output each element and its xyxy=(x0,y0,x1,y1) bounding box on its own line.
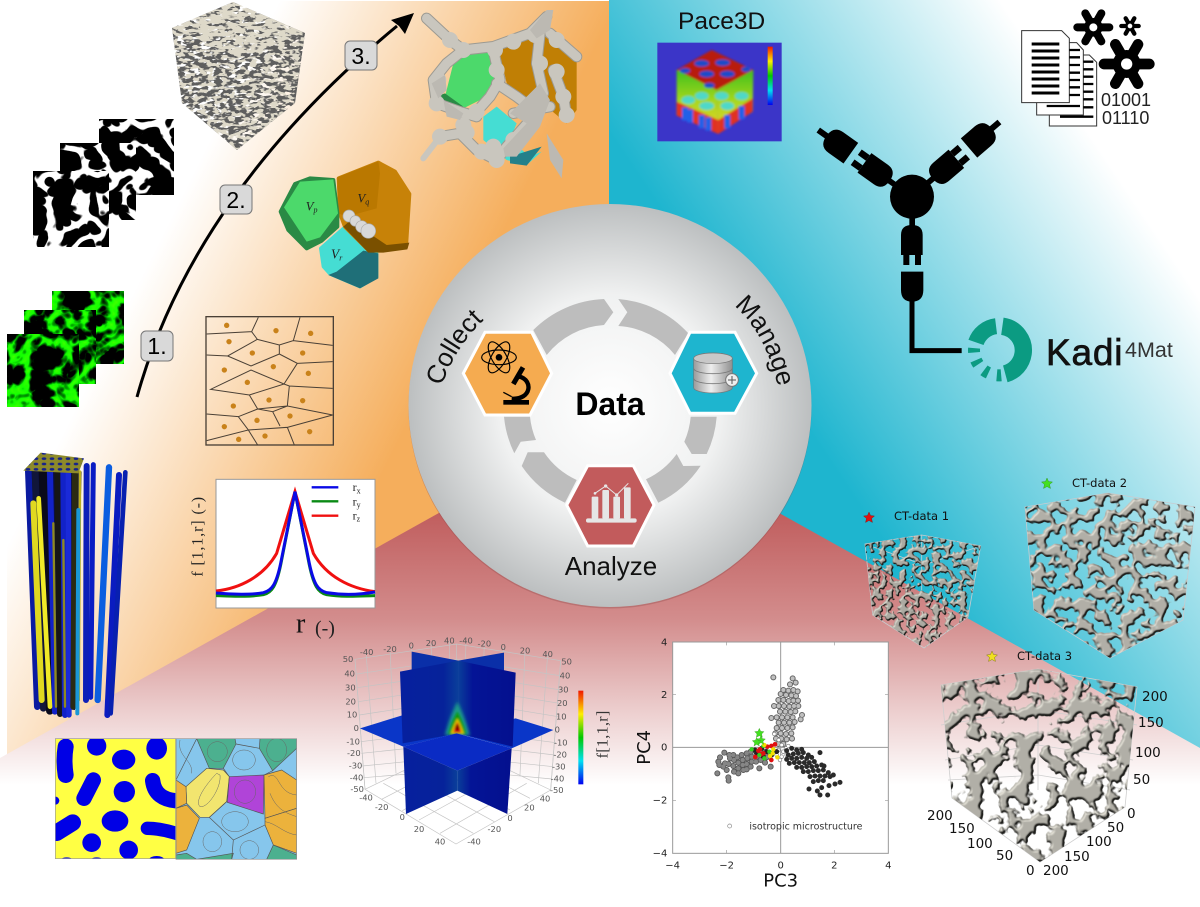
chart: 3D cross-section plot: -40 xyxy=(551,774,564,784)
chart: 3D cross-section plot: -30 xyxy=(552,761,566,771)
label: Collect: Collect xyxy=(428,310,484,382)
chart: 3D cross-section plot: 0 xyxy=(555,725,560,735)
chart: PC3 vs PC4 scatter xyxy=(634,637,892,892)
chart: PC3 vs PC4 scatter: −2 xyxy=(653,795,667,806)
chart: 3D cross-section plot: 0 xyxy=(501,642,506,652)
CT-data 3 volume with axes: 200 xyxy=(927,808,953,824)
CT-data 2 volume xyxy=(1025,476,1195,658)
chart: 3D cross-section plot: f[1,1,r] xyxy=(594,710,611,758)
simulation: multiphase grains colored xyxy=(176,738,297,859)
CT-data 3 volume with axes: 100 xyxy=(1135,745,1161,761)
label: Manage: Manage xyxy=(736,294,790,385)
chart: 3D cross-section plot: 20 xyxy=(426,638,436,648)
panel: teal manage background xyxy=(609,0,1200,750)
CT-data 3 volume with axes: 0 xyxy=(1127,806,1136,822)
heading: Pace3D: Pace3D xyxy=(678,8,765,35)
cycle arrows xyxy=(504,299,717,503)
3D porous cube xyxy=(172,2,305,150)
CT-data 3 volume with axes: 0 xyxy=(1026,863,1035,879)
fibers bundle 3D xyxy=(23,453,125,715)
icon: three-way connector xyxy=(811,112,1008,351)
chart: PC3 vs PC4 scatter: 0 xyxy=(661,743,667,754)
polyhedra grains Vp Vq Vr: r xyxy=(339,253,343,262)
CT-data 3 volume with axes: 150 xyxy=(1064,849,1090,865)
chart: correlation f[1,1,r] line plot: x xyxy=(357,486,361,495)
chart: correlation f[1,1,r] line plot: y xyxy=(357,501,361,510)
chart: 3D cross-section plot: 20 xyxy=(557,698,568,708)
chart: 3D cross-section plot: -10 xyxy=(346,736,360,746)
step label 1: 1. xyxy=(147,333,167,359)
chart: 3D cross-section plot: 20 xyxy=(520,645,530,655)
polyhedra grains Vp Vq Vr: V xyxy=(357,192,365,206)
chart: 3D cross-section plot: 30 xyxy=(558,685,569,695)
chart: 3D cross-section plot: -40 xyxy=(467,836,481,846)
CT-data 3 volume with axes: 200 xyxy=(1043,863,1069,879)
chart: 3D cross-section plot: 0 xyxy=(400,812,405,822)
chart: 3D cross-section plot: -50 xyxy=(550,785,564,795)
CT-data 1 volume xyxy=(864,509,981,648)
chart: correlation f[1,1,r] line plot: r xyxy=(353,494,357,508)
chart: correlation f[1,1,r] line plot: (-) xyxy=(315,617,335,639)
logo text: Kadi4Mat: Kadi xyxy=(1046,332,1123,373)
voronoi tessellation xyxy=(206,317,333,445)
CT-data 3 volume with axes: 50 xyxy=(1107,820,1124,836)
CT-data 3 volume with axes: CT-data 3 xyxy=(1017,649,1072,663)
chart: 3D cross-section plot: 40 xyxy=(540,793,550,803)
text: binary digits xyxy=(1101,90,1151,128)
chart: 3D cross-section plot: 40 xyxy=(542,649,553,659)
chart: PC3 vs PC4 scatter: isotropic microstructure xyxy=(749,821,863,832)
step label 3: 3. xyxy=(351,43,371,69)
CT-data 3 volume with axes xyxy=(927,649,1168,879)
chart: 3D cross-section plot: 0 xyxy=(507,813,513,823)
CT-data 3 volume with axes: 100 xyxy=(967,836,993,852)
chart: 3D cross-section plot: -20 xyxy=(347,748,361,758)
step label 2: 2. xyxy=(226,187,246,213)
chart: correlation f[1,1,r] line plot: r xyxy=(353,508,357,522)
chart: PC3 vs PC4 scatter: 4 xyxy=(885,860,892,871)
image stack: binary black and white slices xyxy=(33,119,174,247)
chart: PC3 vs PC4 scatter: 0 xyxy=(777,860,784,871)
CT-data 3 volume with axes: 200 xyxy=(1142,689,1168,705)
polyhedra grains Vp Vq Vr: V xyxy=(331,246,339,261)
panel: red analyze background xyxy=(0,418,1200,907)
text: binary digits: 01110 xyxy=(1102,108,1149,128)
chart: 3D cross-section plot: 40 xyxy=(344,669,355,679)
chart: 3D cross-section plot: -20 xyxy=(383,644,397,654)
chart: 3D cross-section plot: 40 xyxy=(560,671,570,681)
chart: 3D cross-section plot: -20 xyxy=(553,750,567,760)
logo text: Kadi4Mat xyxy=(1046,332,1173,373)
chart: 3D cross-section plot xyxy=(343,635,611,846)
chart: 3D cross-section plot: -10 xyxy=(554,737,568,747)
CT-data 3 volume with axes: 50 xyxy=(996,848,1013,864)
chart: 3D cross-section plot: -40 xyxy=(360,647,373,657)
logo: Kadi4Mat ring xyxy=(964,316,1034,385)
chart: 3D cross-section plot: -40 xyxy=(459,635,473,645)
center label: Data: Data xyxy=(575,386,645,422)
chart: 3D cross-section plot: 30 xyxy=(345,682,356,692)
step label 1 xyxy=(141,331,173,361)
CT-data 3 volume with axes: 50 xyxy=(1133,772,1150,788)
chart: PC3 vs PC4 scatter: 4 xyxy=(661,637,667,648)
logo text: Kadi4Mat: 4Mat xyxy=(1125,338,1173,362)
chart: 3D cross-section plot: 10 xyxy=(347,710,357,720)
chart: 3D cross-section plot: 20 xyxy=(414,824,424,834)
chart: correlation f[1,1,r] line plot: z xyxy=(357,515,361,524)
icon: documents xyxy=(1022,31,1097,126)
chart: 3D cross-section plot: -50 xyxy=(350,784,364,794)
simulation: phase field blue on yellow xyxy=(51,736,178,863)
chart: PC3 vs PC4 scatter: PC4 xyxy=(634,730,655,765)
CT-data 2 volume: CT-data 2 xyxy=(1072,476,1127,490)
chart: 3D cross-section plot: -20 xyxy=(488,824,501,834)
polyhedra grains Vp Vq Vr xyxy=(281,161,409,288)
CT-data 3 volume with axes: 150 xyxy=(949,821,975,837)
chart: 3D cross-section plot: 50 xyxy=(343,654,353,664)
chart: 3D cross-section plot: -20 xyxy=(375,802,388,812)
polyhedra grains Vp Vq Vr: p xyxy=(313,206,318,215)
panel: central data circle xyxy=(408,204,812,608)
hexagon: collect xyxy=(463,332,552,415)
step label 2 xyxy=(220,185,252,214)
CT-data 3 volume with axes: 150 xyxy=(1138,715,1164,731)
hexagon: analyze xyxy=(567,466,654,546)
chart: 3D cross-section plot: -20 xyxy=(478,639,491,649)
chart: correlation f[1,1,r] line plot: r xyxy=(296,608,306,639)
chart: PC3 vs PC4 scatter: PC3 xyxy=(763,871,798,892)
chart: PC3 vs PC4 scatter: −2 xyxy=(719,860,734,871)
chart: 3D cross-section plot: -40 xyxy=(359,792,373,802)
chart: 3D cross-section plot: 0 xyxy=(409,641,414,651)
chart: correlation f[1,1,r] line plot: f [1,1,r] (-) xyxy=(189,496,206,577)
polyhedra with pore network xyxy=(423,10,577,178)
step label 3 xyxy=(345,41,377,70)
chart: 3D cross-section plot: -40 xyxy=(350,772,363,782)
chart: correlation f[1,1,r] line plot: r xyxy=(353,480,357,494)
label: Analyze: Analyze xyxy=(565,551,657,581)
CT-data 3 volume with axes: 100 xyxy=(1086,834,1112,850)
icon: gears xyxy=(1077,13,1149,84)
chart: 3D cross-section plot: 40 xyxy=(444,635,455,645)
CT-data 1 volume: CT-data 1 xyxy=(894,509,949,523)
image stack: green microscopy slices xyxy=(7,291,124,407)
chart: correlation f[1,1,r] line plot xyxy=(189,479,375,639)
chart: PC3 vs PC4 scatter: −4 xyxy=(653,849,667,860)
chart: 3D cross-section plot: 0 xyxy=(354,723,359,733)
chart: 3D cross-section plot: 10 xyxy=(556,711,567,721)
scatter clusters xyxy=(717,677,840,795)
chart: 3D cross-section plot: 20 xyxy=(524,802,535,812)
chart: PC3 vs PC4 scatter: 2 xyxy=(661,690,667,701)
chart: PC3 vs PC4 scatter: 2 xyxy=(831,860,838,871)
text: binary digits: 01001 xyxy=(1101,90,1151,110)
hexagon: manage xyxy=(670,332,757,413)
image: Pace3D simulation cube xyxy=(657,43,782,141)
chart: 3D cross-section plot: -30 xyxy=(349,761,362,771)
chart: 3D cross-section plot: 20 xyxy=(345,696,356,706)
polyhedra grains Vp Vq Vr: q xyxy=(365,198,369,207)
polyhedra grains Vp Vq Vr: V xyxy=(306,200,314,214)
chart: PC3 vs PC4 scatter: −4 xyxy=(665,860,680,871)
panel: orange collect background xyxy=(7,1,609,755)
arrow: workflow curve xyxy=(137,13,414,397)
chart: 3D cross-section plot: 50 xyxy=(561,656,572,666)
chart: 3D cross-section plot: 40 xyxy=(435,836,445,846)
